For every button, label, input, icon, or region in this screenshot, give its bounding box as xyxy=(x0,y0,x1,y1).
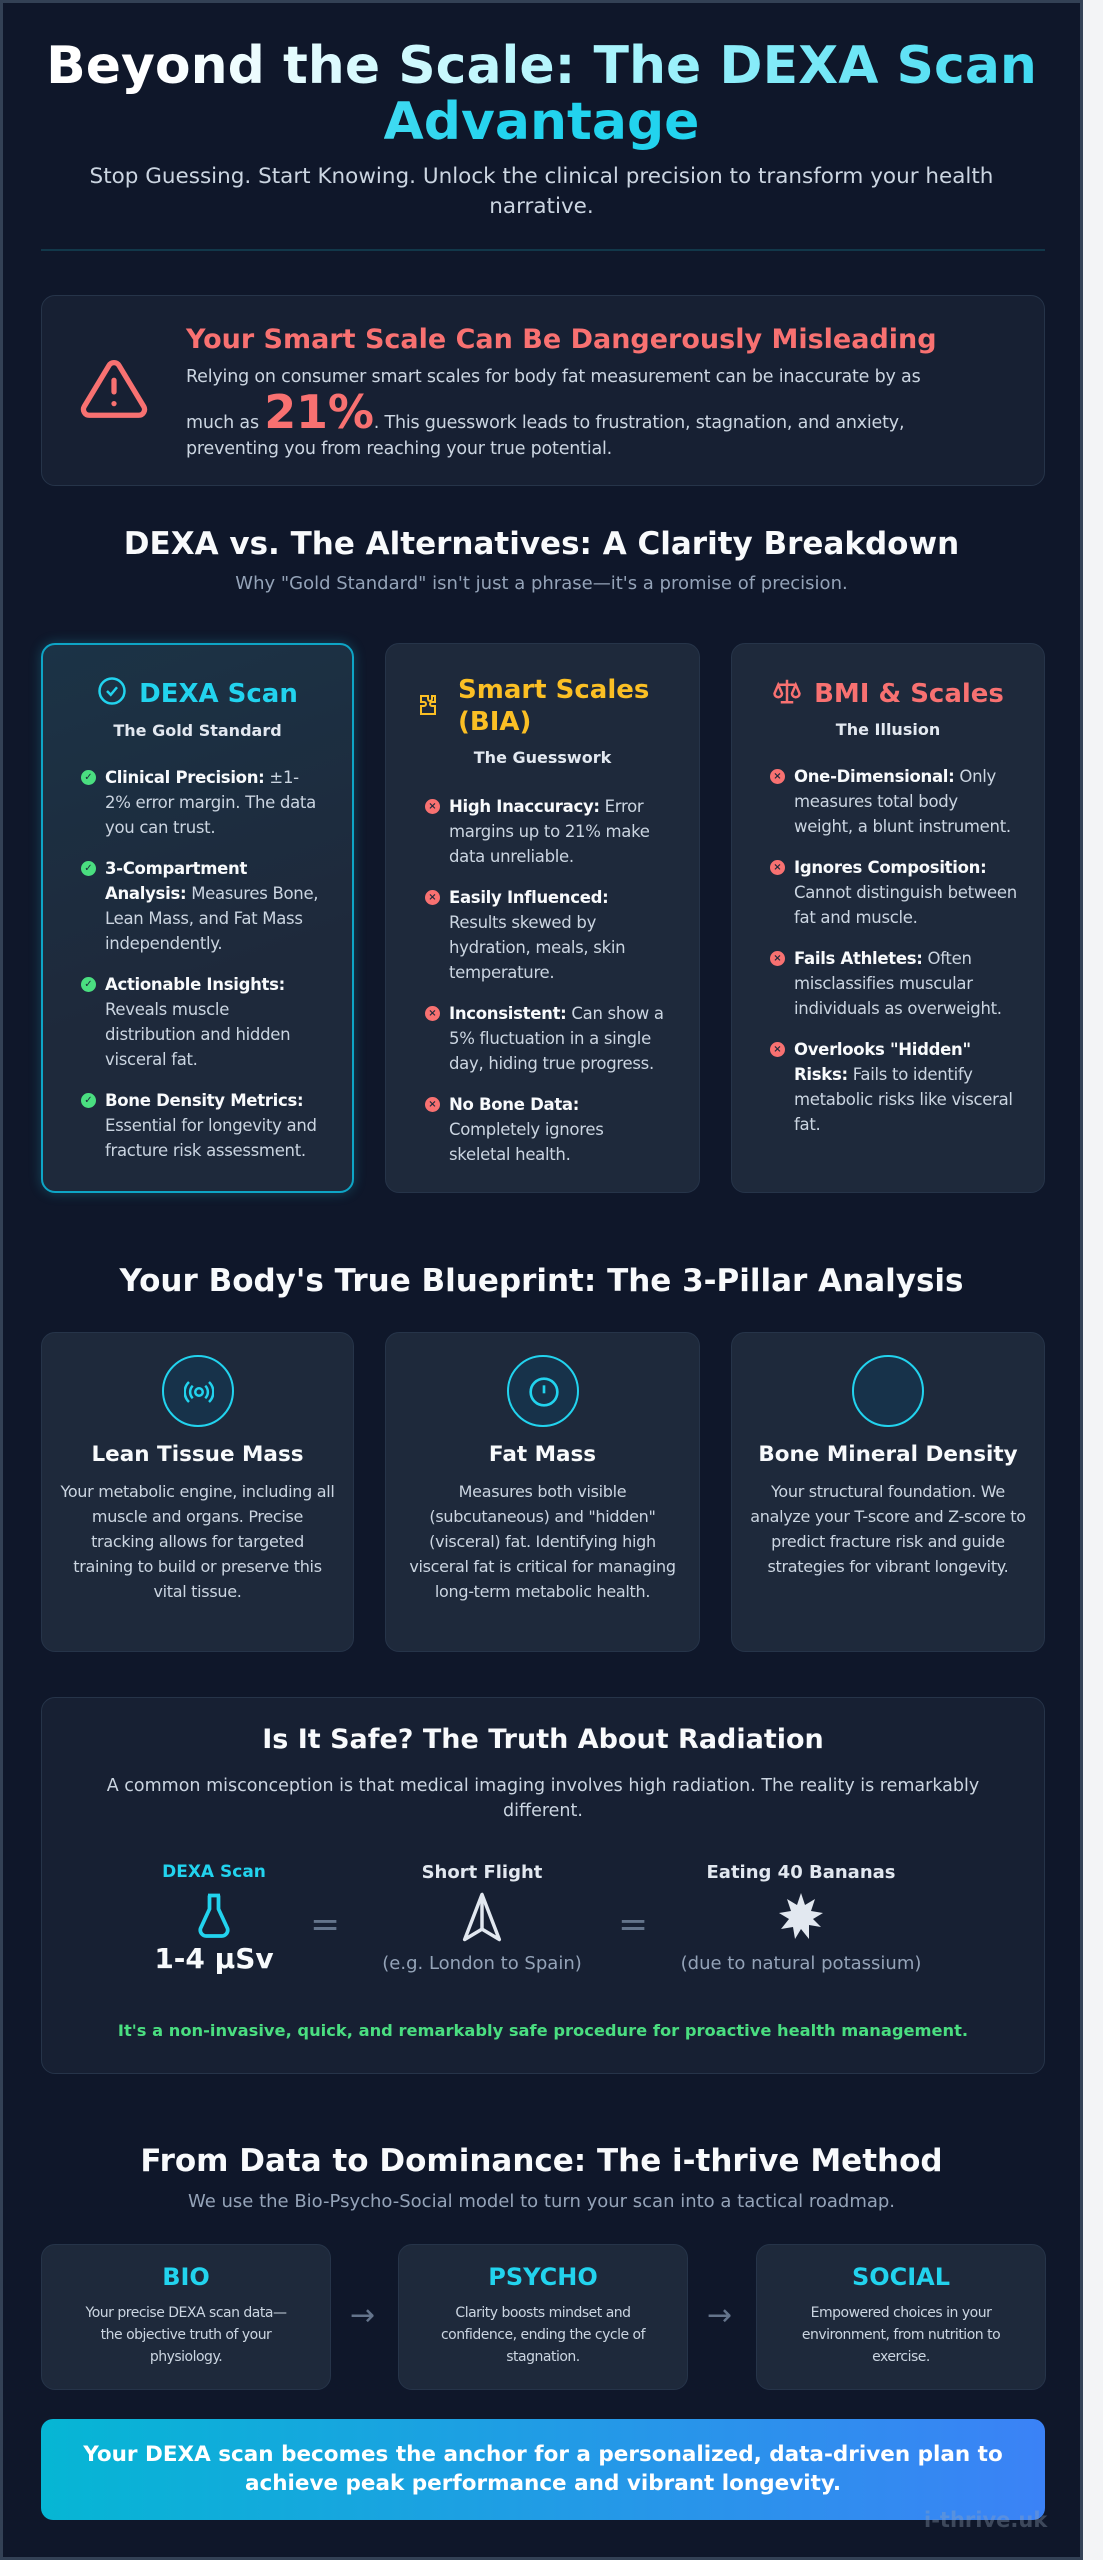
warning heading: Your Smart Scale Can Be Dangerously Misleading xyxy=(186,324,937,355)
step: BIO: Your precise DEXA scan data—the objective truth of your physiology. xyxy=(86,2305,286,2365)
panel: lean tissue: Lean Tissue Mass xyxy=(91,1442,304,1467)
banner: achieve peak performance and vibrant longevity. xyxy=(245,2471,841,2496)
panel: lean tissue xyxy=(41,1332,354,1652)
icon: bone density xyxy=(852,1355,924,1427)
panel: DEXA scan xyxy=(41,643,354,1193)
step: PSYCHO: PSYCHO xyxy=(488,2263,598,2291)
step: PSYCHO xyxy=(398,2244,688,2390)
comparison: short flight: Short Flight xyxy=(422,1862,542,1883)
safety text: A common misconception is that medical imaging involves high radiation. The reality is remarkably different. xyxy=(107,1776,979,1821)
banner: Your DEXA scan becomes the anchor for a personalized, data-driven plan to xyxy=(83,2442,1003,2467)
panel: lean tissue: Your metabolic engine, including all muscle and organs. Precise tracking allows for targeted training to build or preserve this vital tissue. xyxy=(60,1482,335,1601)
BMI flaws list: Overlooks "Hidden" Risks: Fails to identify metabolic risks like visceral fat. xyxy=(794,1040,1013,1134)
comparison: bananas: (due to natural potassium) xyxy=(681,1953,921,1974)
title: Advantage xyxy=(384,92,699,152)
DEXA benefits list: Bone Density Metrics: Essential for longevity and fracture risk assessment. xyxy=(105,1091,317,1160)
icon: lean tissue xyxy=(162,1355,234,1427)
comparison: DEXA dose: DEXA Scan xyxy=(162,1862,266,1882)
panel: DEXA scan: ✓ xyxy=(84,1095,93,1106)
step: SOCIAL: Empowered choices in your environment, from nutrition to exercise. xyxy=(802,2305,1000,2365)
panel: smart scales: The Guesswork xyxy=(474,748,611,767)
panel: fat mass: Measures both visible (subcutaneous) and "hidden" (visceral) fat. Identifying high visceral fat is critical for managing long-term metabolic health. xyxy=(409,1482,676,1601)
comparison: bananas: Eating 40 Bananas xyxy=(706,1862,896,1883)
icon: puzzle xyxy=(420,695,436,715)
icon: flight xyxy=(462,1892,502,1942)
panel: BMI: × xyxy=(773,862,782,873)
smart scales header: (BIA) xyxy=(458,707,531,737)
step: BIO xyxy=(41,2244,331,2390)
panel: BMI xyxy=(731,643,1045,1193)
DEXA benefits list: Actionable Insights: Reveals muscle distribution and hidden visceral fat. xyxy=(105,975,290,1069)
BMI header: BMI & Scales xyxy=(814,679,1004,709)
panel: radiation safety xyxy=(41,1697,1045,2074)
step: BIO: BIO xyxy=(162,2263,210,2291)
heading: comparison: DEXA vs. The Alternatives: A Clarity Breakdown xyxy=(124,526,959,562)
comparison: DEXA dose xyxy=(154,1862,274,1975)
panel: DEXA scan: ✓ xyxy=(84,979,93,990)
BMI flaws list: Fails Athletes: Often misclassifies muscular individuals as overweight. xyxy=(794,949,1002,1018)
panel: DEXA scan: ✓ xyxy=(84,863,93,874)
panel: smart scale warning xyxy=(41,295,1045,486)
title xyxy=(46,36,1037,152)
panel: smart scales xyxy=(385,643,700,1193)
arrow: → xyxy=(707,2298,732,2333)
smart scales header xyxy=(458,675,649,737)
comparison: DEXA dose: 1-4 µSv xyxy=(154,1942,274,1975)
comparison: short flight: (e.g. London to Spain) xyxy=(382,1953,582,1974)
smart scales flaws list: High Inaccuracy: Error margins up to 21% make data unreliable. xyxy=(449,797,650,866)
panel: smart scales: × xyxy=(428,892,437,903)
BMI flaws list: Ignores Composition: Cannot distinguish between fat and muscle. xyxy=(794,858,1017,927)
icon: flask xyxy=(198,1894,230,1938)
arrow: → xyxy=(350,2298,375,2333)
heading: method: From Data to Dominance: The i-thrive Method xyxy=(140,2143,943,2179)
panel: BMI: × xyxy=(773,771,782,782)
title: Beyond the Scale: The DEXA Scan xyxy=(46,36,1037,96)
panel: DEXA scan: ✓ xyxy=(84,772,93,783)
icon: splat xyxy=(779,1893,823,1939)
watermark: i-thrive.uk xyxy=(924,2508,1047,2532)
panel: BMI: × xyxy=(773,1044,782,1055)
step: SOCIAL xyxy=(756,2244,1046,2390)
panel: BMI: The Illusion xyxy=(836,720,940,739)
comparison: short flight xyxy=(382,1862,582,1974)
panel: BMI: × xyxy=(773,953,782,964)
equals sign: = xyxy=(310,1904,340,1945)
safety heading: Is It Safe? The Truth About Radiation xyxy=(262,1724,824,1755)
icon: fat mass xyxy=(506,1355,578,1427)
comparison: bananas xyxy=(681,1862,921,1974)
heading: 3 pillars: Your Body's True Blueprint: The 3-Pillar Analysis xyxy=(120,1263,963,1299)
subheading: method: We use the Bio-Psycho-Social model to turn your scan into a tactical roadmap. xyxy=(188,2191,895,2212)
DEXA benefits list: Clinical Precision: ±1-2% error margin. The data you can trust. xyxy=(105,768,316,837)
DEXA benefits list: 3-Compartment Analysis: Measures Bone, Lean Mass, and Fat Mass independently. xyxy=(105,859,318,953)
step: SOCIAL: SOCIAL xyxy=(852,2263,950,2291)
icon: warning triangle xyxy=(80,360,148,418)
equals sign: = xyxy=(618,1904,648,1945)
safety conclusion: It's a non-invasive, quick, and remarkably safe procedure for proactive health management. xyxy=(118,2021,968,2040)
panel: smart scales: × xyxy=(428,1008,437,1019)
panel: smart scales: × xyxy=(428,801,437,812)
subheading: comparison: Why "Gold Standard" isn't just a phrase—it's a promise of precision. xyxy=(235,573,848,594)
panel: fat mass: Fat Mass xyxy=(489,1442,596,1467)
DEXA benefits list xyxy=(81,768,318,1160)
DEXA header: DEXA Scan xyxy=(139,679,298,709)
banner xyxy=(41,2419,1045,2520)
BMI flaws list xyxy=(770,767,1017,1134)
warning text: Relying on consumer smart scales for body fat measurement can be inaccurate by as much as 21%. This guesswork leads to frustration, stagnation, and anxiety, preventing you from reaching your true potential. xyxy=(186,367,920,459)
panel: smart scales: × xyxy=(428,1099,437,1110)
panel: bone density xyxy=(731,1332,1045,1652)
smart scales flaws list: Inconsistent: Can show a 5% fluctuation in a single day, hiding true progress. xyxy=(449,1004,664,1073)
panel: bone density: Your structural foundation. We analyze your T-score and Z-score to predict fracture risk and guide strategies for vibrant longevity. xyxy=(750,1482,1026,1576)
BMI flaws list: One-Dimensional: Only measures total body weight, a blunt instrument. xyxy=(794,767,1011,836)
subtitle: Stop Guessing. Start Knowing. Unlock the clinical precision to transform your health narrative. xyxy=(90,164,993,219)
panel: bone density: Bone Mineral Density xyxy=(758,1442,1018,1467)
smart scales flaws list: No Bone Data: Completely ignores skeletal health. xyxy=(449,1095,604,1164)
step: PSYCHO: Clarity boosts mindset and confidence, ending the cycle of stagnation. xyxy=(441,2305,645,2365)
smart scales header: Smart Scales xyxy=(458,675,649,705)
smart scales flaws list xyxy=(425,797,664,1164)
panel: DEXA scan: The Gold Standard xyxy=(113,721,282,740)
panel: fat mass xyxy=(385,1332,700,1652)
smart scales flaws list: Easily Influenced: Results skewed by hydration, meals, skin temperature. xyxy=(449,888,625,982)
